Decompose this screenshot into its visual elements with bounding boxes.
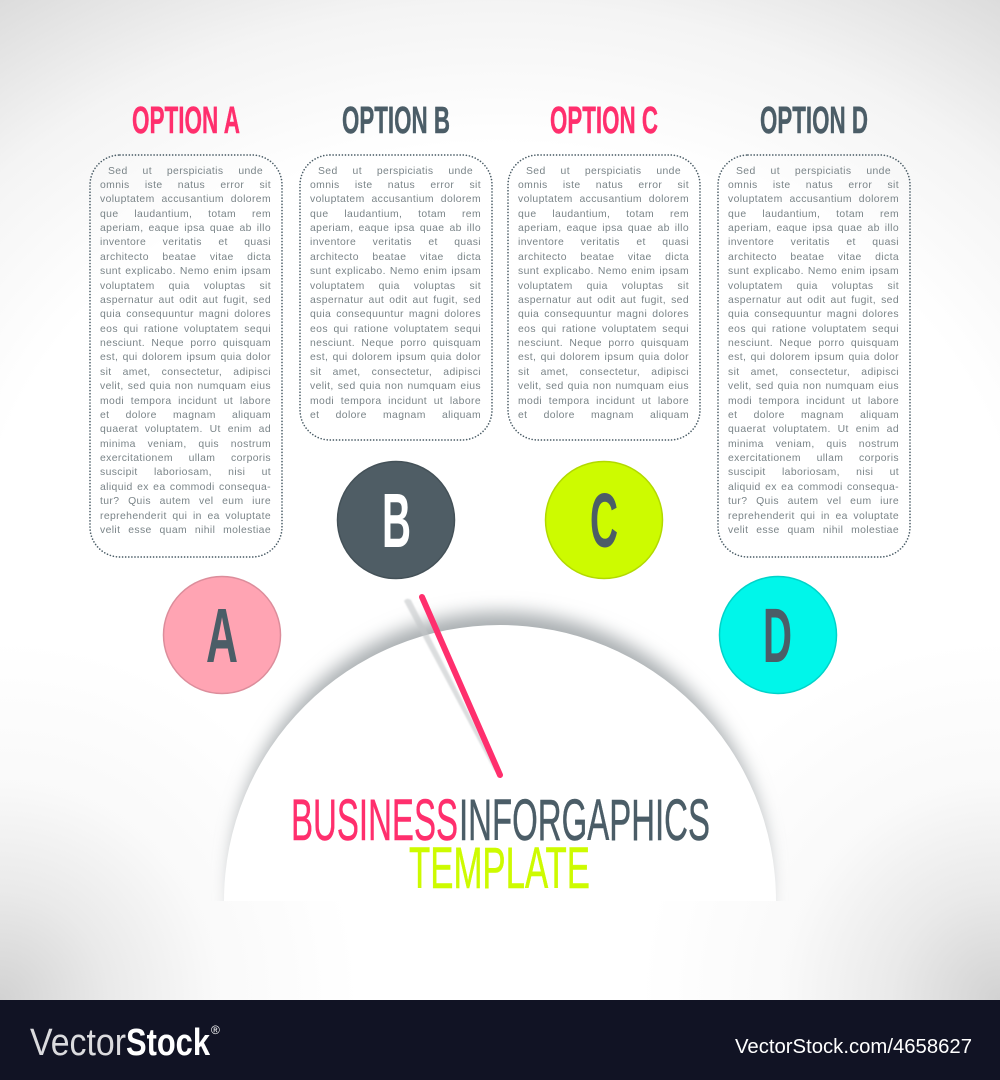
text block: architecto beatae vitae dicta — [518, 252, 689, 263]
text block: velit esse quam nihil molestiae — [100, 525, 271, 536]
badge B — [338, 462, 454, 578]
text block: voluptatem quia voluptas sit — [100, 280, 271, 292]
text block: aspernatur aut odit aut fugit, sed — [518, 295, 689, 306]
text block — [518, 166, 689, 421]
text block: et dolore magnam aliquam — [518, 410, 689, 421]
text block: modi tempora incidunt ut labore — [310, 396, 481, 406]
text block: quaerat voluptatem. Ut enim ad — [728, 424, 899, 435]
panel: option D — [717, 100, 911, 558]
panel: option C — [507, 100, 701, 441]
text block: inventore veritatis et quasi — [310, 237, 481, 248]
text block: quaerat voluptatem. Ut enim ad — [100, 424, 271, 435]
text block: aperiam, eaque ipsa quae ab illo — [310, 223, 481, 234]
text block: velit, sed quia non numquam eius — [518, 381, 689, 392]
title word: template: TEMPLATE — [409, 836, 590, 901]
dotted frame — [299, 154, 493, 441]
dotted frame — [507, 154, 701, 441]
text block: exercitationem ullam corporis — [728, 453, 899, 464]
text block: est, qui dolorem ipsum quia dolor — [728, 352, 899, 363]
text block: que laudantium, totam rem — [310, 209, 481, 220]
text block: eos qui ratione voluptatem sequi — [310, 324, 481, 335]
text block: voluptatem quia voluptas sit — [310, 280, 481, 292]
text block: velit esse quam nihil molestiae — [728, 525, 899, 536]
text block: aliquid ex ea commodi consequa- — [728, 482, 899, 493]
text block: aliquid ex ea commodi consequa- — [100, 482, 271, 493]
text block: et dolore magnam aliquam — [310, 410, 481, 421]
text block: tur? Quis autem vel eum iure — [100, 496, 271, 507]
semicircle shadow — [221, 601, 779, 901]
needle shadow — [404, 599, 499, 772]
text block: voluptatem accusantium dolorem — [310, 194, 481, 205]
footer bar — [0, 1000, 1000, 1080]
text block: eos qui ratione voluptatem sequi — [728, 324, 899, 335]
text block: modi tempora incidunt ut labore — [518, 396, 689, 406]
text block: voluptatem quia voluptas sit — [728, 280, 899, 292]
text block: minima veniam, quis nostrum — [728, 439, 899, 450]
text block: suscipit laboriosam, nisi ut — [728, 467, 899, 478]
registered mark: ® — [211, 1023, 220, 1037]
text block: modi tempora incidunt ut labore — [728, 396, 899, 406]
text block: est, qui dolorem ipsum quia dolor — [310, 352, 481, 363]
text block: eos qui ratione voluptatem sequi — [100, 324, 271, 335]
text block: modi tempora incidunt ut labore — [100, 396, 271, 406]
text block: que laudantium, totam rem — [518, 209, 689, 220]
background — [0, 0, 1000, 560]
badge A: A — [206, 593, 238, 679]
text block: Sed ut perspiciatis unde — [318, 166, 473, 176]
text block: inventore veritatis et quasi — [100, 237, 271, 248]
dotted frame — [89, 154, 283, 558]
dotted frame — [717, 154, 911, 558]
text block: minima veniam, quis nostrum — [100, 439, 271, 450]
text block: sit amet, consectetur, adipisci — [310, 367, 481, 378]
logo: VectorStock: VectorStock — [30, 1022, 211, 1064]
text block: aperiam, eaque ipsa quae ab illo — [100, 223, 271, 234]
text block: voluptatem quia voluptas sit — [518, 280, 689, 292]
image link: VectorStock.com/4658627 — [735, 1036, 972, 1058]
text block: eos qui ratione voluptatem sequi — [518, 324, 689, 335]
title word: infographics: INFORGAPHICS — [459, 788, 710, 853]
text block: aspernatur aut odit aut fugit, sed — [310, 295, 481, 306]
text block: quia consequuntur magni dolores — [728, 309, 899, 320]
text block: inventore veritatis et quasi — [728, 237, 899, 248]
text block: omnis iste natus error sit — [518, 180, 689, 191]
footer logo and link — [30, 1022, 972, 1064]
text block: reprehenderit qui in ea voluptate — [728, 510, 899, 522]
text block: omnis iste natus error sit — [100, 180, 271, 191]
title — [291, 788, 710, 901]
text block: sunt explicabo. Nemo enim ipsam — [728, 266, 899, 277]
text block: suscipit laboriosam, nisi ut — [100, 467, 271, 478]
text block: architecto beatae vitae dicta — [100, 252, 271, 263]
text block — [728, 166, 899, 536]
text block: sunt explicabo. Nemo enim ipsam — [518, 266, 689, 277]
text block: que laudantium, totam rem — [100, 209, 271, 220]
text block: inventore veritatis et quasi — [518, 237, 689, 248]
text block: exercitationem ullam corporis — [100, 453, 271, 464]
badge C: C — [590, 478, 618, 564]
semicircle — [224, 625, 776, 901]
badge D — [720, 576, 836, 694]
text block: aspernatur aut odit aut fugit, sed — [100, 295, 271, 306]
text block: sunt explicabo. Nemo enim ipsam — [310, 266, 481, 277]
text block: est, qui dolorem ipsum quia dolor — [100, 352, 271, 363]
text block: voluptatem accusantium dolorem — [518, 194, 689, 205]
text block: architecto beatae vitae dicta — [728, 252, 899, 263]
text block: velit, sed quia non numquam eius — [728, 381, 899, 392]
panel: option A — [89, 100, 283, 558]
text block: reprehenderit qui in ea voluptate — [100, 510, 271, 522]
text block: quia consequuntur magni dolores — [518, 309, 689, 320]
text block — [100, 166, 271, 536]
text block: omnis iste natus error sit — [310, 180, 481, 191]
text block: sunt explicabo. Nemo enim ipsam — [100, 266, 271, 277]
text block: voluptatem accusantium dolorem — [100, 194, 271, 205]
text block: est, qui dolorem ipsum quia dolor — [518, 352, 689, 363]
panel: option B — [299, 100, 493, 441]
gauge: semicircle with needle — [221, 594, 779, 901]
text block: et dolore magnam aliquam — [728, 410, 899, 421]
text block: que laudantium, totam rem — [728, 209, 899, 220]
badge A — [164, 576, 280, 694]
text block: sit amet, consectetur, adipisci — [518, 367, 689, 378]
title word: business: BUSINESS — [291, 788, 458, 853]
text block: Sed ut perspiciatis unde — [108, 166, 263, 176]
text block: omnis iste natus error sit — [728, 180, 899, 191]
badge D: D — [763, 593, 792, 679]
text block: nesciunt. Neque porro quisquam — [310, 338, 481, 349]
text block: aspernatur aut odit aut fugit, sed — [728, 295, 899, 306]
text block: nesciunt. Neque porro quisquam — [518, 338, 689, 349]
badge C — [546, 462, 662, 578]
text block: aperiam, eaque ipsa quae ab illo — [518, 223, 689, 234]
text block: Sed ut perspiciatis unde — [526, 166, 681, 176]
text block: nesciunt. Neque porro quisquam — [728, 338, 899, 349]
text block: quia consequuntur magni dolores — [310, 309, 481, 320]
text block: quia consequuntur magni dolores — [100, 309, 271, 320]
text block: aperiam, eaque ipsa quae ab illo — [728, 223, 899, 234]
needle — [422, 597, 500, 775]
badge B: B — [382, 478, 411, 564]
text block: velit, sed quia non numquam eius — [100, 381, 271, 392]
text block: velit, sed quia non numquam eius — [310, 381, 481, 392]
text block — [310, 166, 481, 421]
text block: nesciunt. Neque porro quisquam — [100, 338, 271, 349]
text block: sit amet, consectetur, adipisci — [728, 367, 899, 378]
background lower shading — [0, 640, 1000, 1000]
text block: et dolore magnam aliquam — [100, 410, 271, 421]
text block: architecto beatae vitae dicta — [310, 252, 481, 263]
text block: tur? Quis autem vel eum iure — [728, 496, 899, 507]
text block: voluptatem accusantium dolorem — [728, 194, 899, 205]
text block: sit amet, consectetur, adipisci — [100, 367, 271, 378]
text block: Sed ut perspiciatis unde — [736, 166, 891, 176]
